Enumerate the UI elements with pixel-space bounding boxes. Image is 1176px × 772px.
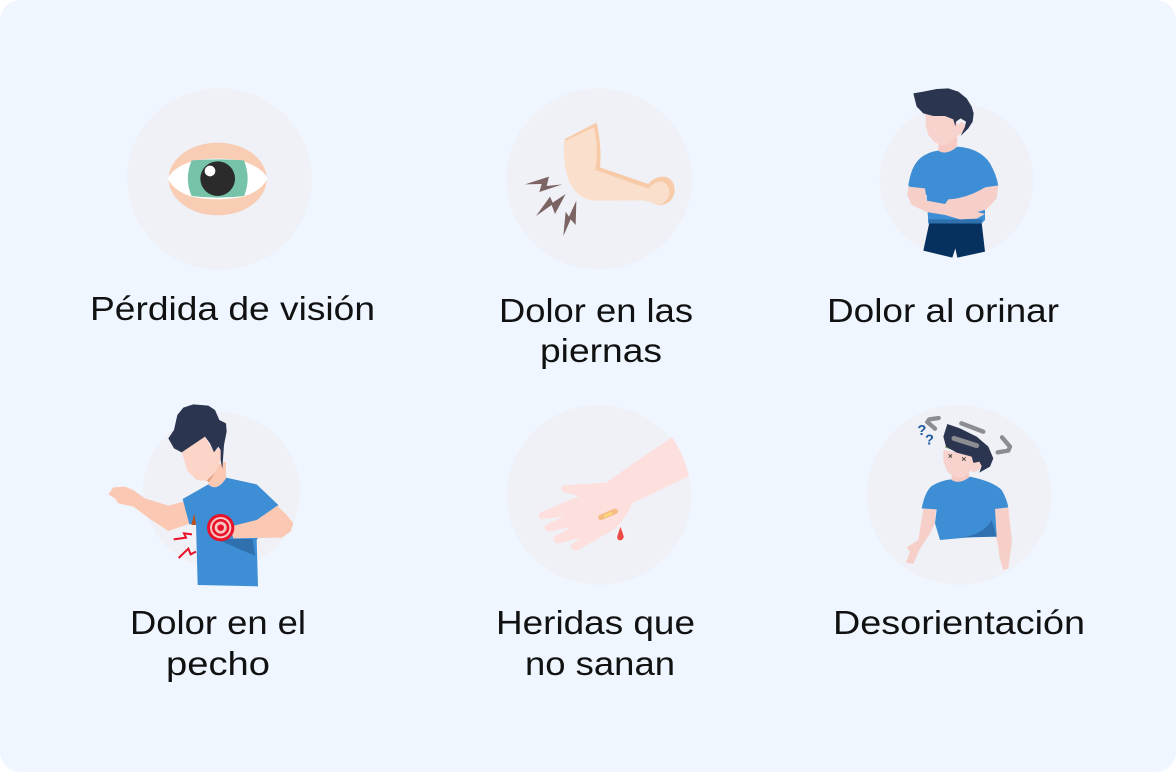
icon circle: leg bbox=[506, 88, 692, 270]
icon circle: person bbox=[143, 412, 300, 570]
pain marks bbox=[174, 533, 196, 558]
label: no sanan bbox=[525, 645, 675, 682]
item: Dolor en el pecho bbox=[108, 404, 306, 682]
label: Desorientación bbox=[833, 604, 1085, 641]
crossed eyes bbox=[949, 454, 966, 461]
label: Pérdida de visión bbox=[90, 290, 375, 327]
item: Heridas que no sanan bbox=[496, 405, 695, 682]
icon: aching leg bbox=[525, 123, 675, 236]
icon circle: eye bbox=[127, 88, 312, 270]
label bbox=[496, 604, 695, 682]
item: Desorientación bbox=[833, 405, 1085, 641]
icon circle: person bbox=[866, 405, 1052, 585]
label: Dolor al orinar bbox=[827, 292, 1059, 329]
label: Heridas que bbox=[496, 604, 695, 641]
dizzy motion marks bbox=[927, 418, 1010, 452]
label: pecho bbox=[166, 645, 270, 682]
blood drop bbox=[617, 525, 624, 541]
icon: wounded hand bbox=[540, 439, 687, 549]
icon: person holding abdomen bbox=[907, 88, 998, 258]
icon circle: hand bbox=[506, 405, 692, 585]
label bbox=[499, 292, 693, 369]
item: Pérdida de visión bbox=[90, 88, 375, 327]
label: Dolor en el bbox=[130, 604, 306, 641]
icon: eye bbox=[168, 143, 268, 215]
label: Dolor en las bbox=[499, 292, 693, 329]
question marks: ? bbox=[917, 423, 926, 439]
icon circle: person bbox=[880, 103, 1034, 257]
question marks bbox=[917, 423, 934, 448]
item: Dolor al orinar bbox=[827, 88, 1059, 329]
icon: dizzy person bbox=[906, 418, 1012, 570]
question marks: ? bbox=[925, 432, 934, 448]
pain bolts bbox=[525, 177, 576, 236]
label bbox=[130, 604, 306, 682]
bandage bbox=[601, 511, 615, 517]
label: piernas bbox=[540, 332, 662, 369]
item: Dolor en las piernas bbox=[499, 88, 693, 369]
icon: person with chest pain bbox=[108, 404, 293, 586]
